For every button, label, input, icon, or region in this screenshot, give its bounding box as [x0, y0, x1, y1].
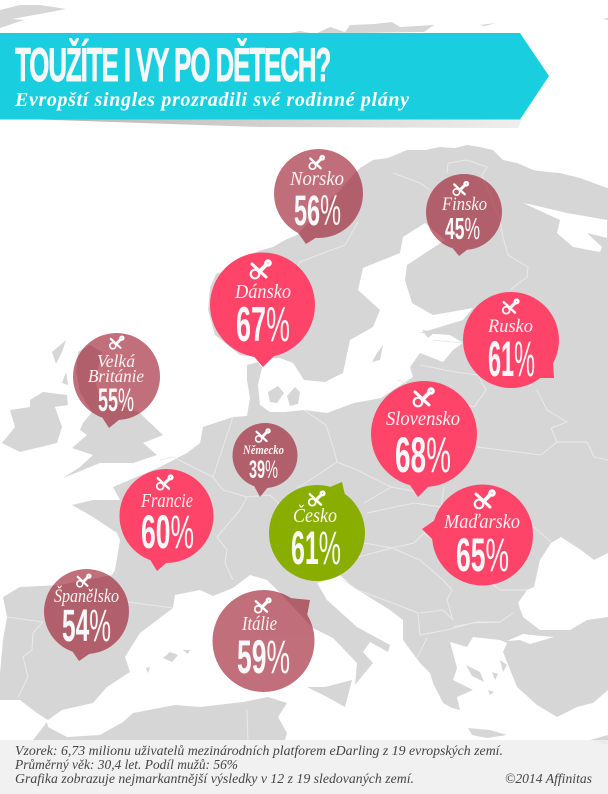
- bubble: Francie: [120, 469, 214, 571]
- icon: pacifier: [453, 182, 468, 195]
- subtitle: Evropští singles prozradili své rodinné plány: [14, 89, 409, 111]
- value: 61%: [488, 331, 535, 387]
- label: Španělsko: [54, 585, 119, 607]
- icon: pacifier: [309, 492, 324, 506]
- label: Dánsko: [234, 281, 291, 303]
- bubble: Německo: [232, 423, 298, 497]
- bubble: Finsko: [426, 174, 502, 256]
- label: Maďarsko: [443, 511, 520, 533]
- bubble: Španělsko: [44, 569, 129, 661]
- bubble: Norsko: [274, 149, 363, 244]
- banner: [0, 33, 549, 120]
- icon: pacifier: [251, 261, 270, 278]
- title: TOUŽÍTE I VY PO DĚTECH?: [15, 38, 331, 92]
- copyright: ©2014 Affinitas: [505, 771, 592, 786]
- bubble: Rusko: [463, 292, 559, 388]
- value: 56%: [294, 187, 341, 235]
- icon: pacifier: [256, 429, 270, 442]
- label: Finsko: [441, 194, 487, 215]
- value: 45%: [445, 211, 480, 246]
- age note: Průměrný věk: 30,4 let. Podíl mužů: 56%: [14, 757, 238, 772]
- icon: pacifier: [503, 300, 518, 314]
- icon: pacifier: [309, 156, 324, 169]
- value: 39%: [249, 456, 278, 484]
- bubble: Slovensko: [371, 381, 477, 497]
- value: 54%: [62, 600, 111, 651]
- icon: pacifier: [77, 575, 90, 587]
- footer panel: [0, 740, 608, 794]
- chart note: Grafika zobrazuje nejmarkantnější výsledky v 12 z 19 sledovaných zemí.: [15, 771, 414, 786]
- label: Velká: [97, 351, 135, 371]
- label: Slovensko: [386, 408, 460, 430]
- label line 2: Británie: [88, 366, 144, 386]
- value: 60%: [141, 505, 194, 558]
- value: 55%: [98, 382, 134, 418]
- banner shadow: [25, 119, 522, 128]
- value: 59%: [237, 630, 290, 683]
- label: Norsko: [289, 168, 344, 190]
- label: Francie: [140, 490, 193, 512]
- label: Rusko: [487, 316, 533, 337]
- icon: pacifier: [110, 337, 123, 349]
- icon: pacifier: [255, 599, 270, 613]
- label: Itálie: [241, 613, 277, 635]
- icon: pacifier: [157, 476, 172, 490]
- value: 65%: [456, 528, 509, 581]
- icon: pacifier: [475, 491, 494, 508]
- value: 68%: [395, 427, 451, 483]
- label: Německo: [242, 442, 284, 457]
- value: 67%: [236, 298, 290, 352]
- bubble: Maďarsko: [422, 484, 533, 586]
- sample note: Vzorek: 6,73 milionu uživatelů mezinárodních platforem eDarling z 19 evropských zemí.: [15, 743, 503, 758]
- bubble: Česko: [269, 482, 365, 581]
- bubble: Velká Británie: [73, 333, 160, 428]
- icon: pacifier: [414, 389, 433, 406]
- value: 61%: [291, 521, 341, 574]
- bubble: Itálie: [212, 590, 314, 692]
- bubble: Dánsko: [210, 252, 315, 367]
- label: Česko: [293, 503, 337, 527]
